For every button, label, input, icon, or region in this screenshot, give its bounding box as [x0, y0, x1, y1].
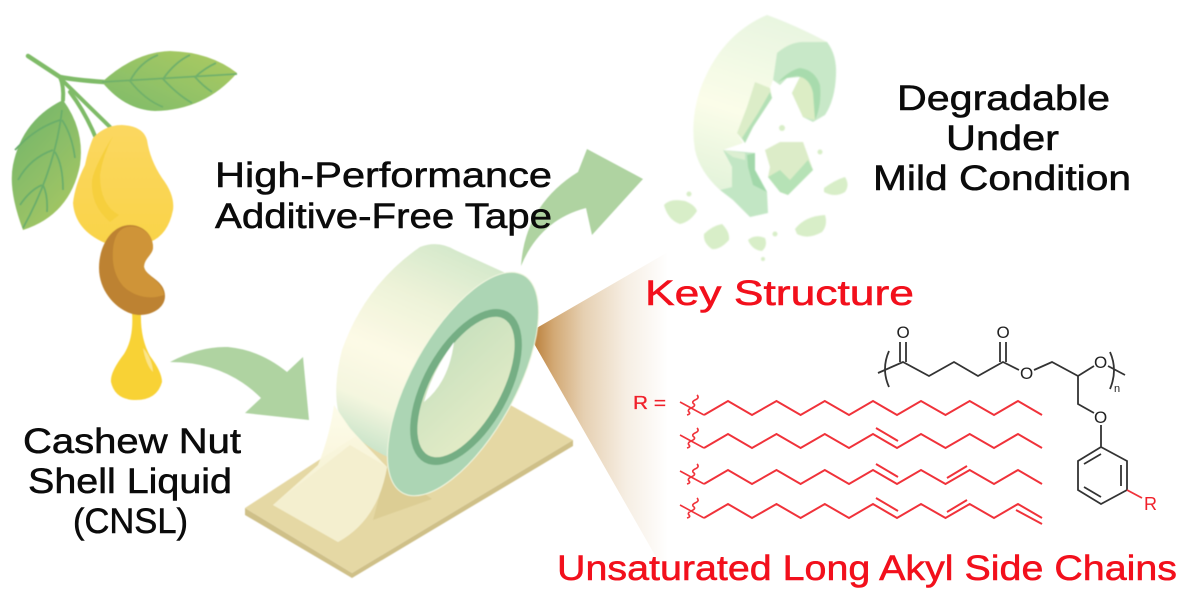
upper right fragment — [773, 42, 836, 122]
heading: key structure: Key Structure — [645, 274, 914, 313]
polymer structure: n — [1114, 383, 1120, 395]
heading: high-performance tape: Additive-Free Tape — [215, 197, 552, 236]
polymer structure: O — [1094, 353, 1107, 372]
polymer structure: O — [996, 323, 1010, 342]
lower fragment — [720, 150, 768, 217]
wedge: zoom from tape to structure — [528, 252, 668, 578]
caption: side chains: Unsaturated Long Akyl Side Chains — [557, 549, 1177, 588]
heading: CNSL: (CNSL) — [73, 502, 188, 541]
icon: tape roll on plate — [245, 244, 573, 578]
heading: CNSL — [23, 422, 241, 541]
heading: CNSL: Shell Liquid — [28, 462, 232, 501]
tape roll body — [336, 244, 520, 480]
small chunks — [664, 125, 848, 261]
polymer structure: R — [1144, 494, 1157, 514]
leaf top — [102, 51, 237, 111]
heading: degradable — [873, 79, 1131, 198]
fruit — [73, 125, 173, 243]
oil drop — [111, 312, 162, 400]
polymer structure: O — [1094, 408, 1107, 427]
chain 4 three double bonds — [680, 498, 1042, 524]
arrow: CNSL to tape — [170, 347, 309, 420]
back shell — [693, 15, 827, 190]
nut — [99, 225, 165, 315]
polymer structure: O — [896, 323, 910, 342]
tape front face — [357, 250, 569, 518]
heading: CNSL: Cashew Nut — [23, 422, 241, 461]
polymer structure — [878, 323, 1157, 514]
stems — [28, 56, 110, 136]
base plate — [245, 373, 573, 578]
chain 1 saturated — [680, 395, 1042, 415]
tape strip — [273, 405, 387, 542]
icon: cashew plant — [12, 51, 237, 400]
heading: degradable: Mild Condition — [873, 159, 1131, 198]
icon: degraded tape fragments — [664, 15, 848, 261]
heading: high-performance tape — [215, 156, 552, 236]
middle fragment — [737, 82, 772, 143]
polymer structure: O — [1020, 364, 1033, 383]
R group label: R = — [633, 393, 666, 413]
heading: high-performance tape: High-Performance — [215, 156, 552, 195]
heading: degradable: Under — [946, 119, 1059, 158]
arrow: tape to degraded tape — [521, 149, 643, 266]
alkyl side chains — [680, 395, 1042, 524]
chain 3 two double bonds — [680, 464, 1042, 484]
chain 2 one double bond — [680, 428, 1042, 448]
heading: degradable: Degradable — [897, 79, 1110, 118]
leaf left — [12, 100, 81, 230]
centre fragment — [765, 142, 813, 195]
